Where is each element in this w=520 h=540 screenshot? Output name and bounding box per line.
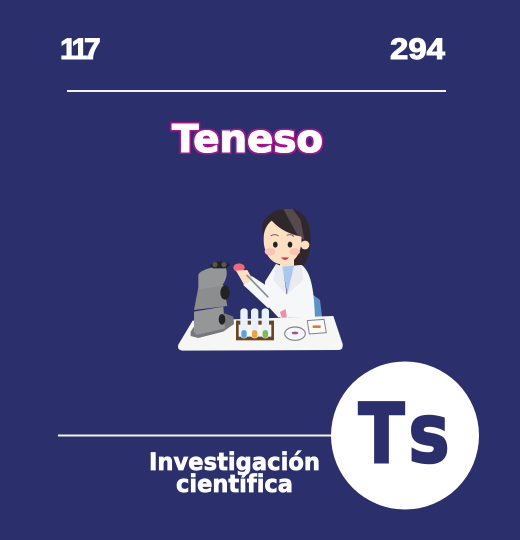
sample tray: [307, 319, 326, 334]
eyes and mouth: [271, 235, 294, 237]
symbol badge: s: [408, 387, 450, 482]
lab coat body: [265, 264, 315, 317]
atomic mass: 294: [390, 33, 445, 66]
blouse: [282, 266, 294, 294]
face: [264, 221, 301, 264]
symbol badge: [331, 362, 479, 510]
illustration: scientist at lab bench: [178, 209, 343, 351]
cheeks: [265, 248, 275, 255]
raised arm: [243, 276, 278, 308]
table: [178, 316, 343, 351]
chair: [312, 295, 322, 317]
test tube rack: [236, 308, 274, 340]
category label: [149, 448, 320, 498]
atomic number: 117: [60, 33, 101, 66]
neck: [280, 258, 294, 272]
hair back: [262, 209, 310, 268]
microscope: [191, 261, 234, 338]
category label: científica: [176, 470, 293, 498]
lower arm holding tube: [268, 297, 289, 317]
symbol badge: T: [358, 387, 405, 482]
petri dish: [285, 327, 305, 340]
hand and sample: [233, 263, 245, 272]
title: Teneso: [172, 117, 323, 161]
category label: Investigación: [149, 448, 320, 476]
